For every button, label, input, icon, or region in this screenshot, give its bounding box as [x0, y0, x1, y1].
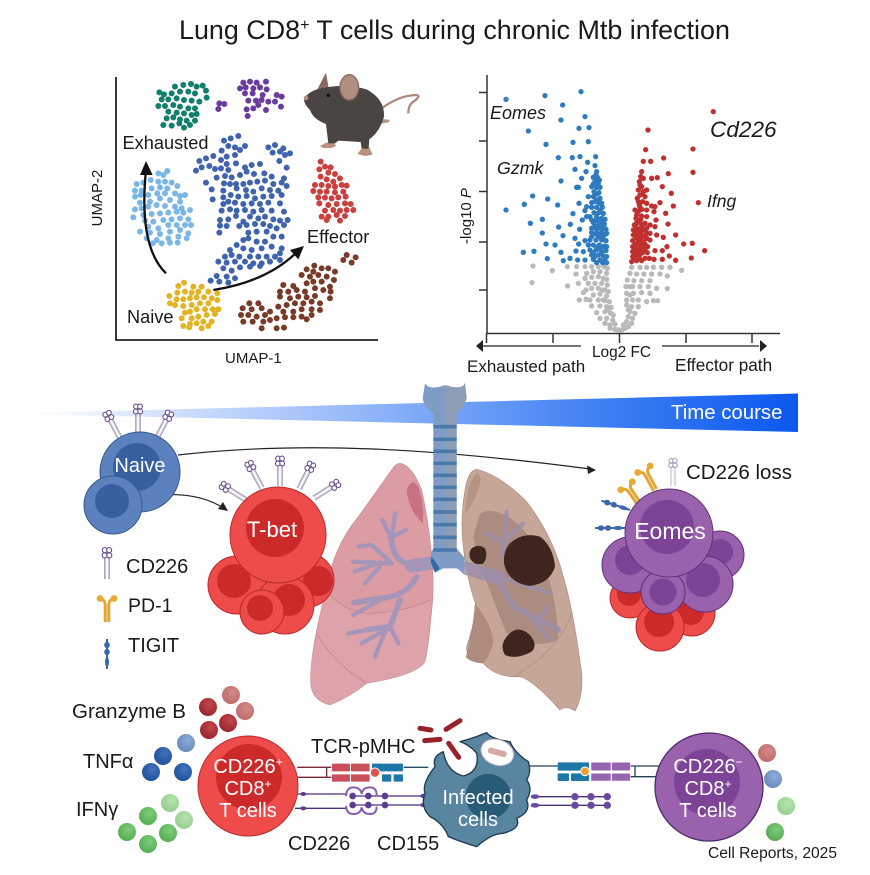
cluster label: Exhausted: Exhausted: [122, 133, 208, 153]
left CD226-CD155 bonds: [295, 787, 428, 814]
granzyme B granules: [199, 686, 254, 739]
CD226- CD8+ T cell: CD226: [673, 756, 736, 778]
volcano axes: [479, 75, 780, 343]
CD226+ CD8+ T cell: +: [264, 777, 272, 791]
label: TIGIT: TIGIT: [128, 635, 179, 657]
volcano points: [506, 92, 713, 330]
lost CD226 receptor: [669, 458, 677, 486]
infected cell: [423, 733, 530, 847]
panel: cytokines: [72, 686, 254, 853]
left bronchi: [348, 513, 430, 657]
cell label: T-bet: T-bet: [247, 517, 297, 542]
left lung: [311, 463, 433, 705]
TNFα granules: [142, 734, 195, 781]
icon: PD-1: [97, 595, 117, 622]
title: T cells during chronic Mtb infection: [309, 15, 730, 45]
CD226- CD8+ T cell: −: [736, 755, 743, 769]
TIGIT receptors: [595, 498, 631, 531]
PD-1 receptors: [616, 461, 664, 511]
panel: synapses: [198, 721, 795, 855]
panel: volcano plot: [458, 75, 780, 376]
bacteria: [420, 721, 460, 757]
panel: UMAP scatter: [89, 73, 419, 367]
label: Time course: Time course: [671, 402, 782, 424]
label: CD155: CD155: [377, 833, 439, 855]
right TCR-pMHC and CD155 complex: [530, 762, 665, 809]
cell label: Eomes: Eomes: [634, 518, 706, 544]
label: IFNγ: IFNγ: [76, 799, 118, 821]
UMAP clusters: [133, 82, 356, 328]
CD226+ CD8+ T cell: T cells: [219, 800, 277, 822]
right lung: [462, 469, 582, 711]
direction label: Exhausted path: Exhausted path: [467, 357, 585, 376]
label: CD226: CD226: [126, 556, 188, 578]
axis label: UMAP-2: UMAP-2: [89, 170, 106, 226]
label: CD226 loss: CD226 loss: [686, 461, 792, 484]
cytokines by CD226- cell: [758, 744, 795, 841]
cluster label: Naive: Naive: [127, 307, 174, 327]
CD226- CD8+ T cell: T cells: [679, 800, 737, 822]
CD226+ CD8+ T cell: CD226: [213, 756, 276, 778]
CD226 receptors on T-bet cell: [218, 456, 342, 504]
gene label: Eomes: Eomes: [490, 103, 546, 123]
CD226- CD8+ T cell: CD8: [684, 778, 724, 800]
label: Granzyme B: Granzyme B: [72, 700, 186, 723]
axis label: -log10 P: -log10 P: [458, 188, 475, 244]
citation: Cell Reports, 2025: [708, 845, 837, 862]
trajectory arrows: [140, 161, 304, 290]
title: Lung CD8: [179, 15, 300, 45]
lungs and trachea: [311, 383, 582, 711]
label: TCR-pMHC: TCR-pMHC: [311, 736, 415, 758]
cluster label: Effector: Effector: [307, 227, 369, 247]
axis direction arrows: [476, 340, 767, 352]
title: +: [300, 17, 309, 34]
CD226- CD8+ T cell: [655, 733, 763, 841]
naive cell: [84, 432, 180, 534]
left TCR-pMHC complex: [297, 763, 428, 782]
gene label: Ifng: Ifng: [707, 191, 736, 211]
direction label: Effector path: Effector path: [675, 355, 772, 375]
axis label: UMAP-1: UMAP-1: [225, 350, 282, 367]
infected cell: cells: [458, 809, 498, 831]
progression arrows: [159, 448, 596, 511]
label: TNFα: TNFα: [83, 751, 133, 773]
panel: naive cells: [84, 404, 180, 534]
CD226+ CD8+ T cell: +: [276, 755, 283, 769]
icon: CD226: [102, 548, 112, 579]
cell label: Naive: Naive: [114, 455, 166, 477]
panel: receptor legend: [97, 548, 188, 669]
IFNγ granules: [118, 794, 193, 853]
CD226 receptors on naive cell: [102, 404, 175, 440]
T-bet cell cluster: [208, 487, 334, 634]
time course gradient bar: [30, 394, 798, 432]
CD226+ CD8+ T cell: [198, 736, 298, 836]
label: CD226: CD226: [288, 833, 350, 855]
CD226+ CD8+ T cell: CD8: [224, 778, 264, 800]
gene label: Gzmk: Gzmk: [497, 158, 545, 178]
icon: TIGIT: [104, 639, 110, 669]
gene label: Cd226: Cd226: [710, 117, 777, 142]
axis label: Log2 FC: Log2 FC: [592, 344, 651, 361]
UMAP axes: [116, 77, 378, 340]
trachea: [423, 383, 467, 573]
lung nodules: [469, 535, 555, 657]
panel: T-bet effector cells: [208, 456, 342, 634]
infected cell: Infected: [442, 787, 514, 809]
label: PD-1: PD-1: [128, 595, 172, 617]
CD226- CD8+ T cell: +: [724, 777, 732, 791]
panel: Eomes exhausted cells: [595, 458, 792, 651]
Eomes cell cluster: [602, 489, 744, 651]
icon: mouse: [304, 73, 419, 156]
right bronchi: [467, 512, 558, 640]
